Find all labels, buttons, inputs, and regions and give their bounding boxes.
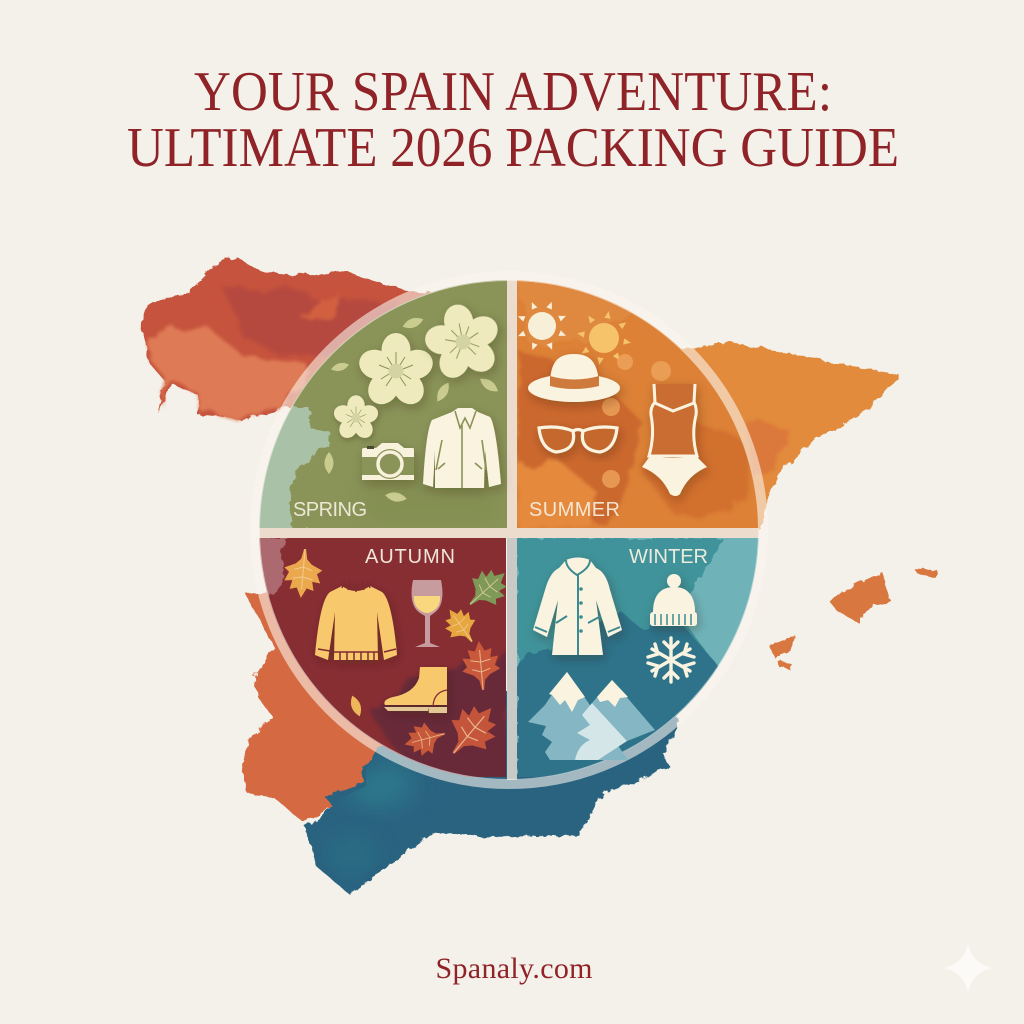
icon: flower large — [355, 333, 437, 410]
icon: snowflake — [648, 638, 694, 682]
footer: website: Spanaly.com — [436, 952, 592, 985]
icon: sun hat — [528, 354, 620, 402]
icon: sun yellow — [572, 306, 636, 370]
icon: maple leaf red — [460, 639, 502, 692]
icon: flower top right — [415, 296, 511, 389]
label: spring: SPRING — [293, 499, 367, 521]
seasonal circle — [250, 270, 770, 790]
icon: maple leaf green — [458, 560, 517, 618]
icon: maple leaf low — [400, 718, 449, 760]
icon: camera — [362, 443, 414, 480]
icon: wine glass — [412, 580, 442, 647]
decorative bokeh — [602, 354, 671, 488]
icon: sweater — [315, 580, 397, 661]
icon: beanie — [650, 574, 697, 626]
map region: south — [305, 690, 680, 895]
icon: small leaf — [348, 694, 364, 718]
icon: mountains — [528, 672, 655, 760]
icon: sparkle — [943, 944, 993, 992]
autumn icons — [282, 547, 517, 768]
map region: southwest — [241, 590, 420, 822]
icon: boot — [384, 667, 447, 713]
icon: maple leaf yellow — [282, 547, 324, 600]
icon: swimsuit — [642, 384, 707, 496]
icon: flower small — [332, 395, 380, 442]
summer icons — [508, 292, 707, 496]
map region: south teal wash — [341, 763, 412, 864]
ring — [255, 276, 763, 784]
map region: northeast — [640, 342, 900, 530]
panel: spring — [250, 270, 510, 530]
circle backing — [250, 270, 770, 790]
title: ULTIMATE 2026 PACKING GUIDE — [127, 116, 899, 179]
icon: sunglasses — [539, 427, 617, 452]
label: summer: SUMMER — [529, 499, 620, 521]
icon: leaves — [324, 315, 501, 503]
label: autumn: AUTUMN — [365, 546, 455, 568]
winter icons — [528, 558, 697, 760]
title — [127, 60, 899, 179]
spring icons — [324, 296, 511, 503]
panel: autumn — [250, 538, 510, 783]
title: YOUR SPAIN ADVENTURE: — [194, 60, 832, 123]
label: winter: WINTER — [629, 546, 708, 568]
panel: winter — [517, 538, 767, 790]
map of Spain — [141, 257, 937, 895]
map region: northwest lighter wash — [146, 327, 310, 417]
icon: coat — [533, 558, 622, 655]
icon: jacket — [423, 408, 501, 488]
map region: northwest — [141, 257, 520, 420]
icon: sun pale — [508, 292, 576, 360]
panel: summer — [517, 270, 767, 530]
icon: maple leaf large — [436, 693, 509, 768]
map islands: Balearics — [769, 567, 937, 670]
icon: maple leaf gold — [437, 601, 484, 650]
